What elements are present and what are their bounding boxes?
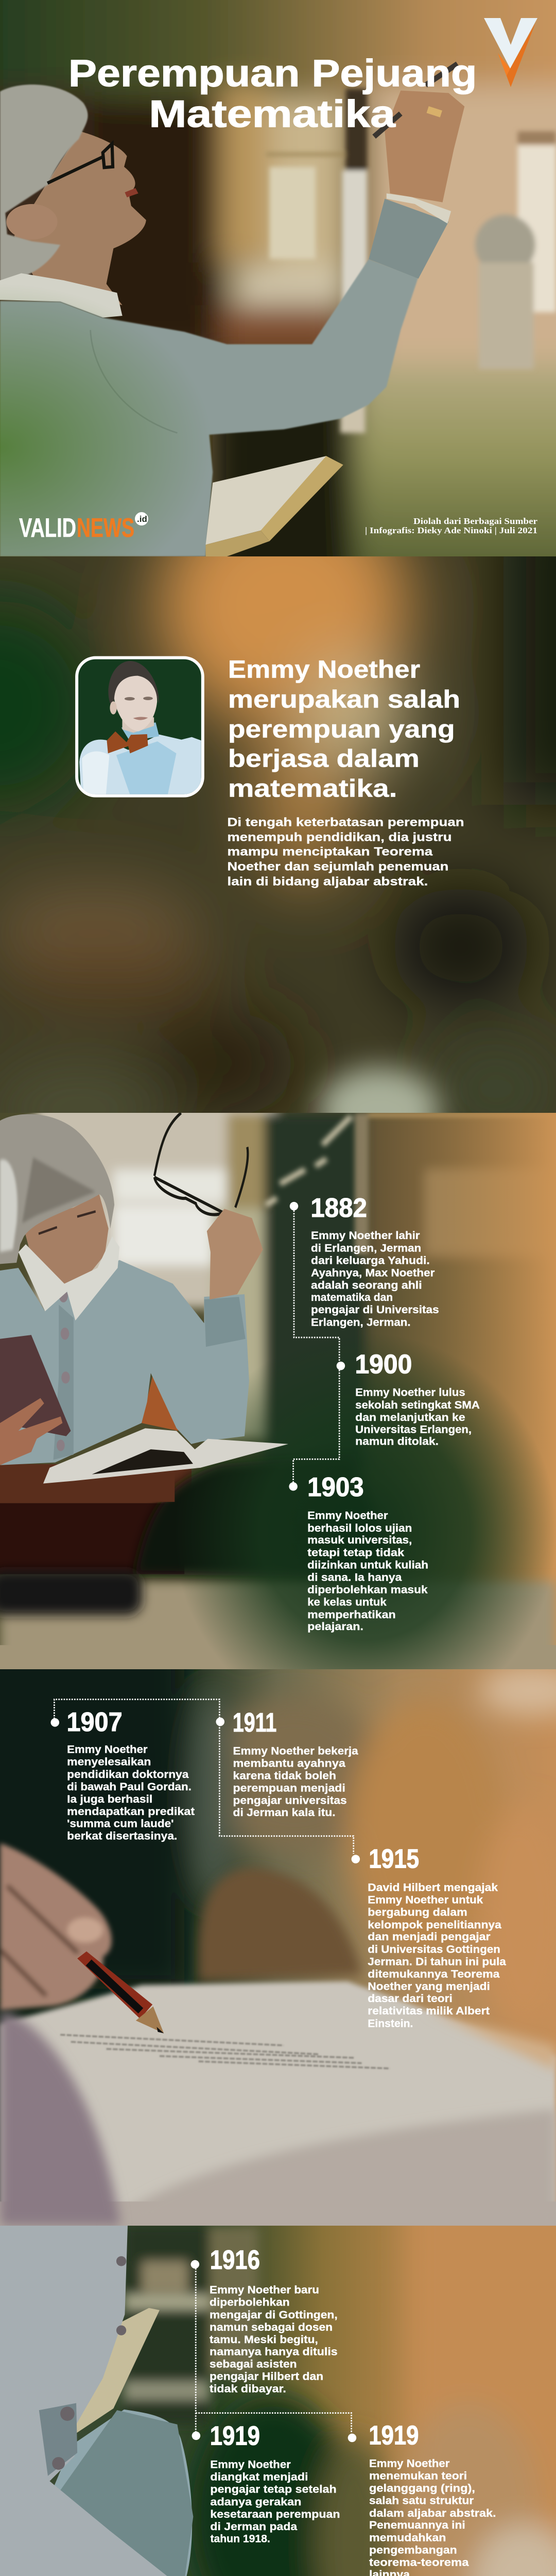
entry 1919: gelanggang <box>369 2420 496 2576</box>
shirt <box>79 735 201 794</box>
body text <box>228 815 464 888</box>
entry 1907: 'summa cum laude' <box>67 1818 174 1830</box>
entry 1915: bergabung dalam <box>368 1906 467 1919</box>
entry 1900: dan melanjutkan ke <box>355 1411 465 1423</box>
small book <box>75 2308 160 2433</box>
entry 1916: 1916 <box>210 2245 260 2275</box>
title: Matematika <box>149 93 396 135</box>
entry 1919: diangkat: pengajar tetap setelah <box>210 2483 337 2496</box>
entry 1882 <box>310 1193 439 1328</box>
entry 1916 <box>210 2245 338 2395</box>
entry 1911 <box>233 1707 358 1819</box>
timeline connector <box>191 2260 356 2442</box>
entry 1903: diperbolehkan masuk <box>307 1584 428 1596</box>
eyes <box>125 697 135 701</box>
logo: Validnews: NEWS <box>77 513 134 543</box>
entry 1903 <box>307 1472 428 1633</box>
entry 1907: Emmy Noether <box>67 1743 148 1756</box>
entry 1882: Ayahnya, Max Noether <box>311 1267 435 1279</box>
hair <box>0 1114 114 1264</box>
table top <box>0 1464 192 1503</box>
entry 1907: pendidikan doktornya <box>67 1768 189 1781</box>
entry 1900: namun ditolak. <box>355 1435 439 1448</box>
entry 1903: berhasil lolos ujian <box>307 1522 412 1534</box>
entry 1907 <box>66 1707 195 1842</box>
tablet hand <box>0 1398 62 1465</box>
body text: lain di bidang aljabar abstrak. <box>228 874 428 888</box>
hair <box>0 84 88 282</box>
logo: V mark <box>484 18 537 87</box>
entry 1911: Emmy Noether bekerja <box>233 1744 358 1757</box>
face <box>24 1194 109 1286</box>
pencil <box>77 1952 164 2033</box>
glasses <box>154 1113 248 1215</box>
entry 1900 <box>355 1349 480 1448</box>
bow tie <box>107 732 148 753</box>
entry 1900: sekolah setingkat SMA <box>355 1399 480 1411</box>
panel: timeline 1916-1919 <box>0 2226 556 2576</box>
credits: Diolah dari Berbagai Sumber <box>413 516 537 526</box>
entry 1915 <box>368 1844 506 2029</box>
entry 1915: Jerman. Di tahun ini pula <box>368 1955 506 1968</box>
entry 1919: diangkat: kesetaraan perempuan <box>210 2508 340 2520</box>
dark strap <box>0 1571 142 1615</box>
collar <box>0 273 123 317</box>
entry 1911: perempuan menjadi <box>233 1782 345 1794</box>
orange tint <box>355 1113 556 1669</box>
entry 1911: pengajar universitas <box>233 1794 347 1807</box>
entry 1911: 1911 <box>233 1707 276 1737</box>
entry 1903: memperhatikan <box>307 1608 396 1621</box>
entry 1911: di Jerman kala itu. <box>233 1806 336 1819</box>
mouth <box>133 717 148 720</box>
entry 1907: di bawah Paul Gordan. <box>67 1781 192 1793</box>
ear <box>110 701 117 715</box>
entry 1919: gelanggang: dalam aljabar abstrak. <box>369 2507 496 2519</box>
entry 1915: Noether yang menjadi <box>368 1980 490 1993</box>
entry 1911: membantu ayahnya <box>233 1757 345 1769</box>
entry 1915: 1915 <box>369 1844 419 1874</box>
open book <box>205 456 343 556</box>
entry 1882: dari keluarga Yahudi. <box>311 1254 430 1266</box>
entry 1882: Emmy Noether lahir <box>311 1229 420 1242</box>
timeline connector <box>50 1700 360 1863</box>
entry 1882: Erlangen, Jerman. <box>311 1316 411 1328</box>
entry 1919: diangkat: diangkat menjadi <box>210 2471 308 2483</box>
entry 1916: mengajar di Gottingen, <box>210 2309 338 2321</box>
placket <box>54 1304 74 1460</box>
body text: mampu menciptakan Teorema <box>228 845 433 858</box>
heading: Emmy Noether <box>228 656 420 684</box>
entry 1919: gelanggang: menemukan teori <box>369 2469 467 2482</box>
collar <box>121 722 160 739</box>
figure: woman writing on board <box>0 64 464 556</box>
entry 1915: kelompok penelitiannya <box>368 1919 501 1931</box>
title <box>68 52 477 135</box>
entry 1907: Ia juga berhasil <box>67 1793 152 1805</box>
entry 1919: diangkat <box>210 2421 340 2545</box>
entry 1915: David Hilbert mengajak <box>368 1881 498 1893</box>
entry 1903: masuk universitas, <box>307 1534 412 1546</box>
panel: hero <box>0 0 556 556</box>
timeline connector <box>289 1202 345 1491</box>
collar <box>19 1236 119 1320</box>
credits <box>365 516 537 535</box>
hand with glasses <box>207 1209 263 1299</box>
entry 1907: menyelesaikan <box>67 1756 151 1768</box>
entry 1915: Einstein. <box>368 2017 413 2029</box>
ear <box>6 204 58 240</box>
entry 1882: 1882 <box>310 1193 367 1223</box>
blurred background hand <box>199 1868 362 1981</box>
logo: Validnews: VALID <box>19 513 76 543</box>
printed text lines <box>60 2035 390 2069</box>
entry 1919: diangkat: 1919 <box>210 2421 260 2451</box>
hand <box>385 91 464 202</box>
entry 1903: 1903 <box>307 1472 364 1502</box>
table <box>0 1465 175 1502</box>
lips <box>125 188 138 197</box>
body text: menempuh pendidikan, dia justru <box>228 830 452 843</box>
entry 1919: gelanggang: 1919 <box>369 2420 419 2450</box>
entry 1919: gelanggang: pengembangan <box>369 2544 457 2556</box>
entry 1919: diangkat: Emmy Noether <box>210 2458 291 2470</box>
panel: introduction <box>0 556 556 1113</box>
entry 1900: Universitas Erlangen, <box>355 1423 472 1435</box>
entry 1882: pengajar di Universitas <box>311 1303 439 1316</box>
entry 1882: matematika dan <box>311 1291 393 1303</box>
entry 1907: 1907 <box>66 1707 123 1737</box>
entry 1903: di sana. Ia hanya <box>307 1571 402 1583</box>
entry 1915: ditemukannya Teorema <box>368 1968 500 1980</box>
body text: Di tengah keterbatasan perempuan <box>228 815 464 828</box>
entry 1915: relativitas milik Albert <box>368 2005 490 2017</box>
heading: matematika. <box>228 774 397 802</box>
panel: timeline 1882-1903 <box>0 1113 556 1669</box>
body text: Noether dan sejumlah penemuan <box>228 860 448 873</box>
entry 1916: tamu. Meski begitu, <box>210 2333 318 2346</box>
entry 1916: sebagai asisten <box>210 2358 297 2370</box>
entry 1916: Emmy Noether baru <box>210 2284 319 2296</box>
face <box>114 676 157 732</box>
hand holding pencil <box>0 1843 112 2010</box>
entry 1882: adalah seorang ahli <box>311 1279 422 1292</box>
hair <box>108 661 159 704</box>
entry 1919: diangkat: di Jerman pada <box>210 2520 297 2533</box>
entry 1916: tidak dibayar. <box>210 2383 286 2395</box>
cuff <box>369 199 448 279</box>
entry 1919: gelanggang: Penemuannya ini <box>369 2519 465 2531</box>
tablet <box>0 1335 71 1436</box>
book page <box>0 1981 556 2226</box>
entry 1903: Emmy Noether <box>307 1510 388 1522</box>
entry 1915: dasar dari teori <box>368 1992 453 2005</box>
portrait: Emmy Noether <box>77 658 203 796</box>
entry 1915: dan menjadi pengajar <box>368 1930 491 1943</box>
figure: seated person in blue shirt <box>11 2410 259 2576</box>
pen <box>374 64 458 137</box>
panel: timeline 1907-1915 <box>0 1669 556 2226</box>
figure: woman reading <box>0 1113 288 1502</box>
green tint <box>174 1333 556 1730</box>
entry 1916: namun sebagai dosen <box>210 2321 333 2333</box>
sweater <box>0 259 419 556</box>
logo: Validnews: .id <box>137 514 147 524</box>
dark object <box>135 1453 390 1578</box>
credits: | Infografis: Dieky Ade Ninoki | Juli 2021 <box>365 526 537 535</box>
face <box>14 131 146 305</box>
entry 1915: Emmy Noether untuk <box>368 1894 483 1906</box>
dark foreground <box>0 1453 556 1669</box>
green tint <box>0 284 355 556</box>
entry 1919: gelanggang: memudahkan <box>369 2531 446 2544</box>
entry 1903: pelajaran. <box>307 1620 363 1633</box>
neck <box>122 717 154 733</box>
entry 1900: Emmy Noether lulus <box>355 1386 465 1399</box>
sweater <box>0 1260 249 1465</box>
glasses <box>47 144 113 183</box>
entry 1900: 1900 <box>355 1349 412 1379</box>
chair <box>142 1376 178 1431</box>
blurred bookshelf <box>124 2226 259 2425</box>
title: Perempuan Pejuang <box>68 52 477 94</box>
entry 1916: diperbolehkan <box>210 2296 290 2309</box>
desk tan foreground <box>0 1581 556 1669</box>
cuff <box>204 1297 246 1347</box>
logo: Validnews <box>19 512 148 543</box>
entry 1919: gelanggang: Emmy Noether <box>369 2457 449 2469</box>
entry 1907: mendapatkan predikat <box>67 1805 195 1818</box>
entry 1919: gelanggang: teorema-teorema <box>369 2556 469 2569</box>
entry 1919: diangkat: tahun 1918. <box>210 2532 270 2545</box>
entry 1916: pengajar Hilbert dan <box>210 2370 323 2383</box>
entry 1903: diizinkan untuk kuliah <box>307 1558 428 1571</box>
heading <box>228 656 460 802</box>
entry 1916: namanya hanya ditulis <box>210 2345 338 2358</box>
heading: merupakan salah <box>228 685 460 713</box>
heading: berjasa dalam <box>228 744 420 772</box>
entry 1915: di Universitas Gottingen <box>368 1943 500 1955</box>
entry 1919: gelanggang: salah satu struktur <box>369 2495 474 2507</box>
entry 1919: diangkat: adanya gerakan <box>210 2496 301 2508</box>
open book <box>43 1428 288 1483</box>
entry 1907: berkat disertasinya. <box>67 1830 177 1842</box>
heading: perempuan yang <box>228 715 455 743</box>
entry 1919: gelanggang: gelanggang (ring), <box>369 2482 475 2495</box>
entry 1911: karena tidak boleh <box>233 1770 336 1782</box>
entry 1903: ke kelas untuk <box>307 1596 387 1608</box>
entry 1903: tetapi tetap tidak <box>307 1546 404 1558</box>
figure: standing person in cardigan <box>0 2226 263 2576</box>
entry 1882: di Erlangen, Jerman <box>311 1242 421 1254</box>
